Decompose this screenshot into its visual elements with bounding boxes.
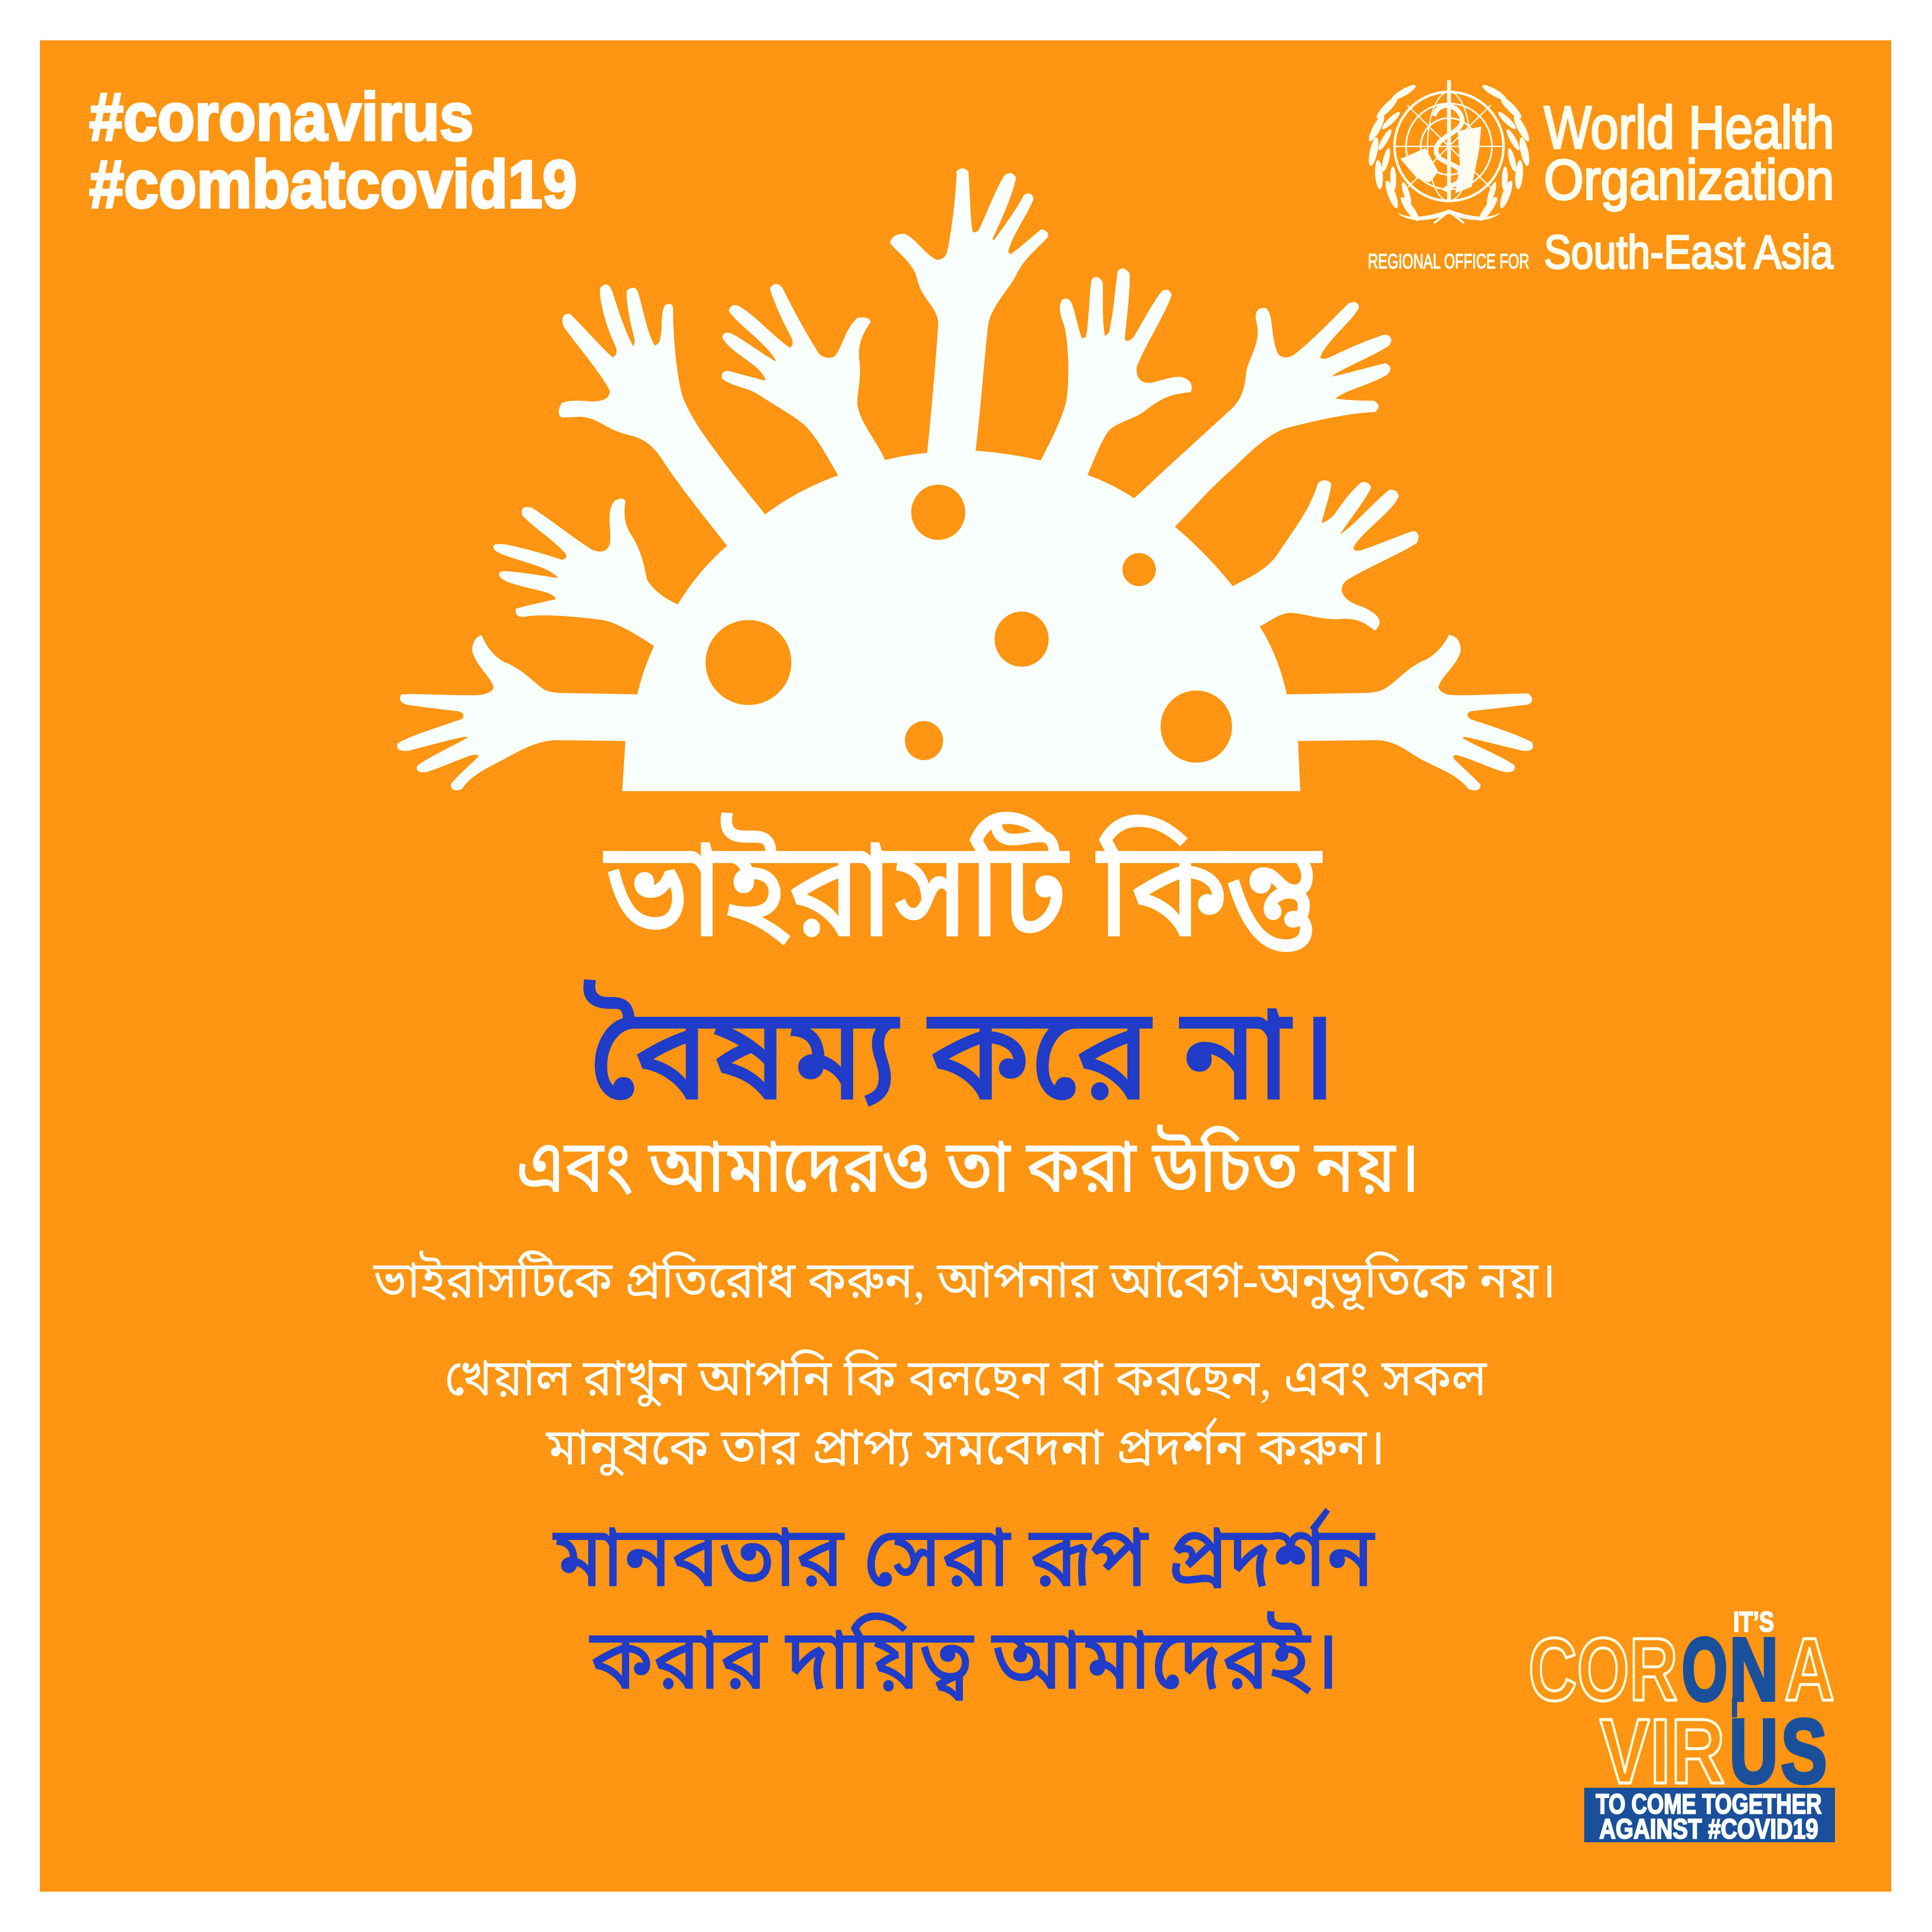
logo: it's on us campaign: U xyxy=(1729,1700,1778,1802)
logo: it's on us campaign: VIR xyxy=(1600,1699,1725,1803)
WHO wordmark: REGIONAL OFFICE FOR xyxy=(1368,250,1529,273)
logo: it's on us campaign: A xyxy=(1784,1619,1835,1719)
WHO wordmark: South-East Asia xyxy=(1544,226,1834,279)
logo: it's on us campaign: AGAINST #COVID19 xyxy=(1599,1813,1818,1844)
text block: mind your words line 2: মানুষকে তার প্রাপ্য সমবেদনা প্রদর্শন করুন। xyxy=(545,1417,1385,1476)
logo: it's on us campaign: O xyxy=(1682,1619,1728,1719)
closing statement: line 2: করার দায়িত্ব আমাদেরই। xyxy=(589,1612,1340,1707)
subheading: এবং আমাদেরও তা করা উচিত নয়। xyxy=(516,1125,1420,1207)
WHO wordmark: Organization xyxy=(1544,148,1834,211)
heading: line 1: ভাইরাসটি কিন্তু xyxy=(604,812,1323,964)
logo: it's on us campaign: TO COME TOGETHER xyxy=(1596,1788,1822,1820)
illustration: virus dome with raised hands xyxy=(397,168,1533,791)
icon: WHO emblem xyxy=(1366,80,1532,223)
WHO wordmark: World Health xyxy=(1544,94,1834,161)
heading: line 2: বৈষম্য করে না। xyxy=(583,979,1338,1126)
text block: resist the virus: ভাইরাসটিকে প্রতিরোধ করুন, আপনার আবেগ-অনুভূতিকে নয়। xyxy=(373,1250,1556,1311)
logo: it's on us campaign: COR xyxy=(1528,1620,1678,1719)
text block: mind your words line 1: খেয়াল রাখুন আপনি কি বলছেন বা করছেন, এবং সকল xyxy=(444,1349,1487,1407)
logo: it's on us campaign: IT’S xyxy=(1733,1606,1774,1637)
logo: it's on us campaign: N xyxy=(1729,1620,1778,1719)
WHO wordmark xyxy=(1368,94,1834,279)
hashtags: #combatcovid19 xyxy=(89,147,577,222)
hashtags: #coronavirus xyxy=(89,79,474,155)
hashtags xyxy=(89,79,577,222)
logo: it's on us campaign: S xyxy=(1781,1701,1827,1802)
logo: it's on us campaign xyxy=(1528,1606,1835,1844)
closing statement: line 1: মানবতার সেরা রূপ প্রদর্শন xyxy=(553,1509,1375,1604)
